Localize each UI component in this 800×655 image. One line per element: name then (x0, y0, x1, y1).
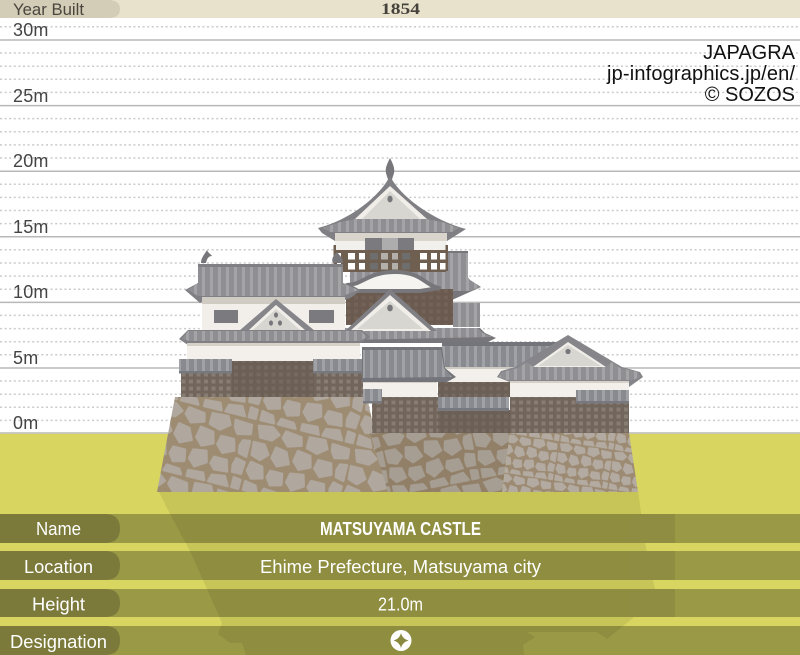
main keep: lower gable (345, 289, 437, 331)
height scale grid (0, 27, 800, 433)
row: height: Height (32, 594, 85, 614)
left building: middle roof (179, 330, 370, 345)
stone base: right (502, 433, 638, 492)
scale labels (13, 20, 49, 433)
row label pills (0, 514, 120, 655)
left building: upper wall (202, 297, 345, 335)
row: height: 21.0m (378, 594, 423, 614)
main keep: lower roof (345, 328, 496, 343)
row: location (24, 557, 541, 577)
main keep: curved karahafu gable (347, 272, 439, 291)
row: name: Name (36, 519, 81, 539)
scale labels: 0m (13, 413, 38, 433)
castle shadow (158, 490, 655, 655)
left building: left small roof (179, 359, 232, 374)
long roof behind right wing (442, 342, 560, 367)
credit (606, 42, 796, 106)
year built pill (0, 0, 120, 18)
scale labels: 30m (13, 20, 49, 40)
header: year built band (0, 0, 800, 18)
right wing: gable roof (497, 335, 643, 387)
middle tower: roof (362, 347, 456, 382)
label: year built: Year Built (13, 0, 84, 19)
left building: white wall (187, 343, 360, 361)
middle tower: small roof (363, 389, 382, 404)
ornament: right shachi (332, 252, 343, 263)
row: designation: Designation (10, 632, 107, 652)
main keep: top wall with windows (335, 233, 447, 252)
left building: right small roof (313, 359, 366, 374)
stone base: middle (370, 433, 510, 492)
row: height (32, 594, 423, 614)
middle tower: lattice wall (372, 397, 438, 433)
centre gate small roof (438, 397, 509, 411)
row: name: MATSUYAMA CASTLE (320, 519, 481, 539)
scale labels: 15m (13, 217, 49, 237)
ornament: left shachi (201, 250, 212, 263)
credit: © SOZOS (705, 84, 795, 106)
left building: lattice walls (181, 361, 364, 397)
scale labels: 25m (13, 86, 49, 106)
scale labels: 10m (13, 282, 49, 302)
main keep: top roof (318, 176, 466, 241)
ground (0, 434, 800, 655)
icon: designation mark (390, 630, 412, 651)
centre gate walls (438, 367, 510, 433)
left building: small gable (239, 299, 315, 331)
stone base: left (157, 397, 388, 492)
right wing: small roof (576, 390, 629, 404)
scale labels: 5m (13, 348, 38, 368)
middle tower: white wall (363, 380, 437, 397)
main keep: second tier roof (350, 251, 481, 300)
row: location: Location (24, 557, 93, 577)
credit: jp-infographics.jp/en/ (606, 63, 795, 85)
main keep: right lower roof block (453, 303, 480, 327)
info bands (0, 514, 800, 655)
main keep: top finial (386, 158, 394, 181)
main keep: brown wall (346, 289, 453, 325)
row: location: Ehime Prefecture, Matsuyama city (260, 557, 541, 577)
left building: upper roof (185, 264, 361, 303)
castle illustration (157, 158, 643, 492)
scale labels: 20m (13, 151, 49, 171)
right band extensions (630, 514, 675, 617)
credit: JAPAGRA (703, 42, 796, 64)
right wing: walls (510, 380, 629, 433)
value: 1854: 1854 (381, 1, 420, 18)
main keep: balcony railing (334, 245, 448, 272)
row: name (36, 519, 481, 539)
